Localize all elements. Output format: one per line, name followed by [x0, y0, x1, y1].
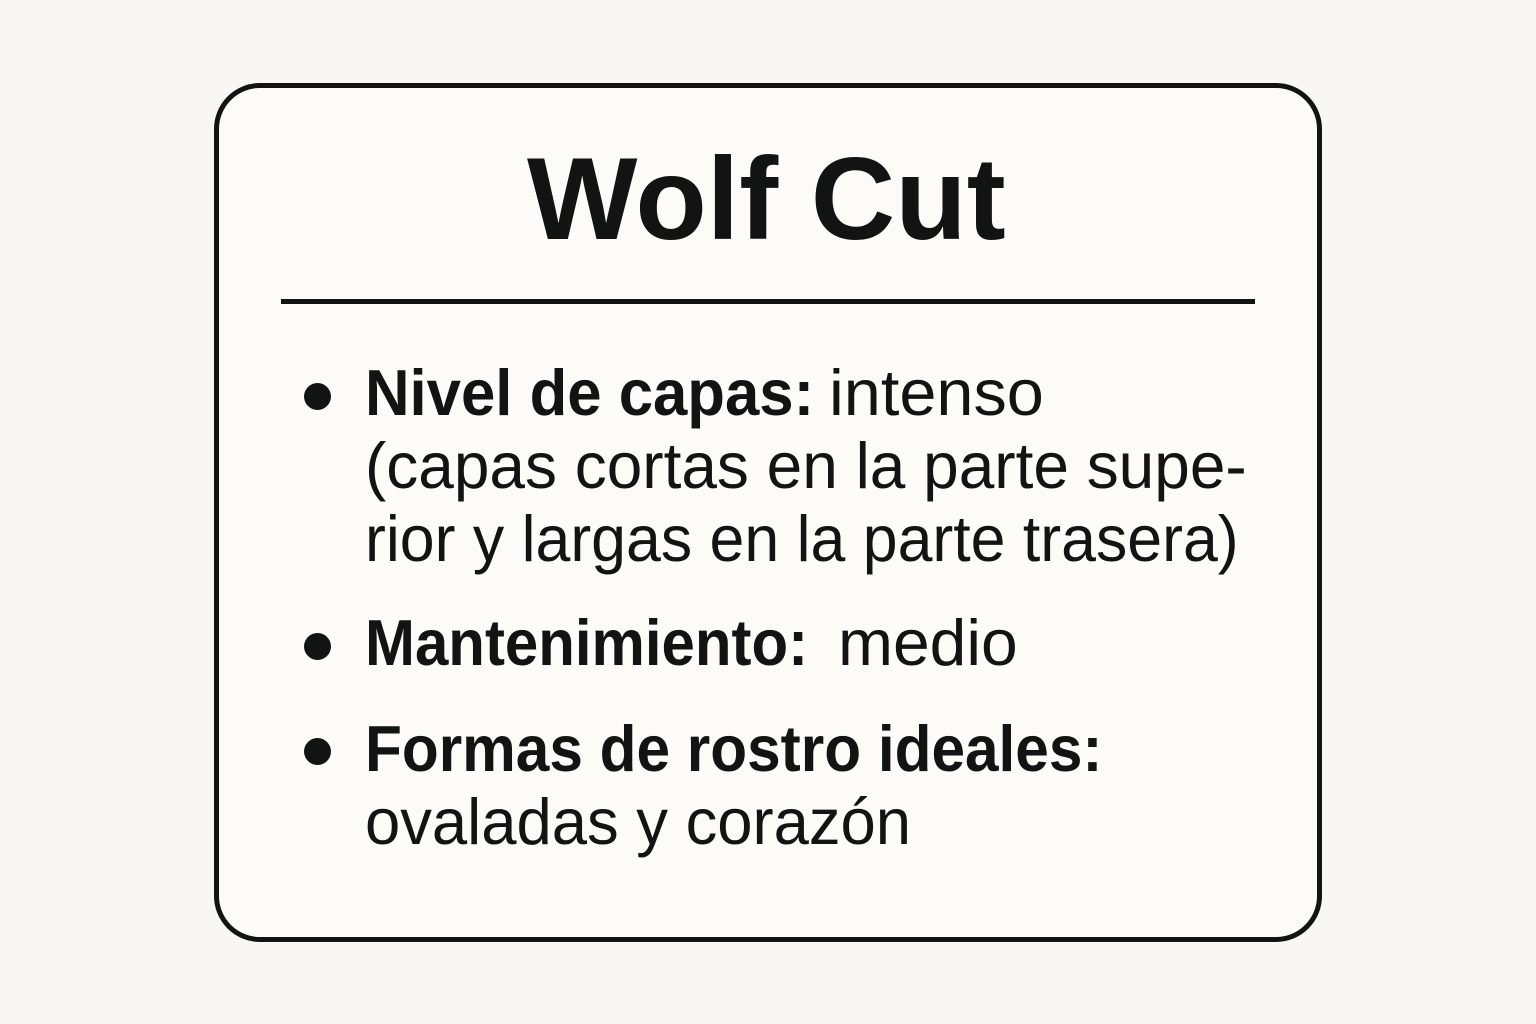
text block: maintenance: Mantenimiento: [365, 606, 808, 679]
text block: ideal face shapes: ovaladas y corazón [365, 785, 911, 858]
bullet icon: face shapes [304, 738, 331, 765]
text block: layer level: intenso [829, 356, 1044, 429]
text block: layer level: (capas cortas en la parte supe- [365, 429, 1247, 502]
text block: layer level [365, 356, 1247, 575]
text block: maintenance [365, 606, 1018, 679]
text block: layer level: Nivel de capas: [365, 356, 814, 429]
text block: ideal face shapes [365, 712, 1102, 858]
text block: ideal face shapes: Formas de rostro ideales: [365, 712, 1102, 785]
bullet icon: layers [304, 383, 331, 410]
text block: maintenance: medio [838, 606, 1018, 679]
divider line [281, 299, 1255, 304]
panel: wolf cut card [214, 83, 1322, 942]
bullet icon: maintenance [304, 633, 331, 660]
text block: layer level: rior y largas en la parte trasera) [365, 502, 1239, 575]
title: Wolf Cut [527, 133, 1006, 264]
